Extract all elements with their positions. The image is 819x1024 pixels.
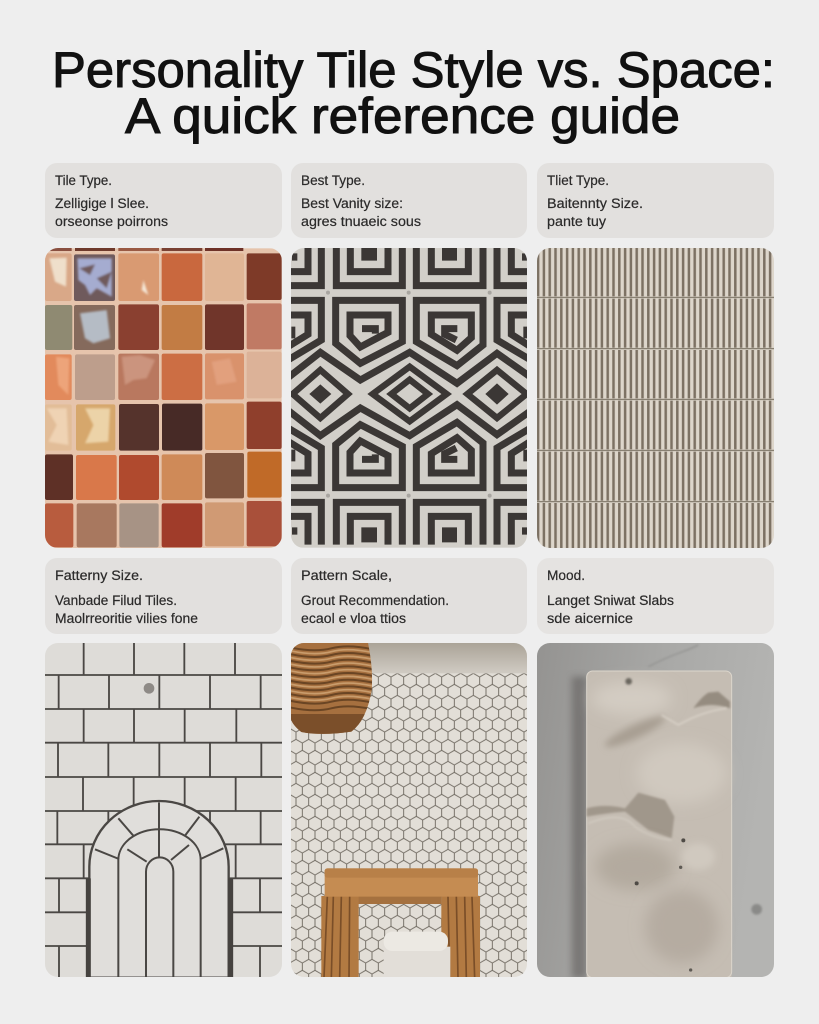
mirrored lower half [288,405,531,545]
caption: tilet type: pante tuy [547,214,606,229]
upper pentagon spirals [336,300,402,363]
panel: black and white geometric tiles [288,243,531,548]
caption: mood: Mood. [547,568,585,583]
caption: pattern size: Maolrreoritie vilies fone [55,611,198,626]
caption: best type [291,163,527,238]
panel: white subway tiles with arch [45,643,282,978]
caption: zellige tile type: Zelligige l Slee. [55,196,149,211]
caption: pattern scale: ecaol e vloa ttios [301,611,406,626]
wooden stool [321,868,480,978]
caption: tilet type: Tliet Type. [547,173,609,188]
title: Personality Tile Style vs. Space: [52,42,775,98]
hexagon zigzag [288,352,531,383]
caption: zellige tile type: Tile Type. [55,173,112,188]
panel: vertical stacked stripe tiles [537,248,777,548]
caption: tilet type [537,163,774,238]
arch [89,801,229,978]
rattan basket pendant [290,643,374,736]
top row squares [288,243,531,286]
caption: zellige tile type [45,163,282,238]
white ceramic vase [384,932,450,978]
upper wall [291,643,528,673]
caption: best type: Best Vanity size: [301,196,403,211]
caption: pattern size [45,558,282,634]
caption: best type: agres tnuaeic sous [301,214,421,229]
caption: mood: Langet Sniwat Slabs [547,593,674,608]
title [52,42,775,144]
panel: large stone slab [537,643,775,984]
panel: hexagon tile wall with basket and stool [290,643,528,978]
caption: pattern size: Fatterny Size. [55,568,143,583]
panel: terracotta zellige tiles [45,248,282,548]
title: A quick reference guide [125,88,680,144]
caption: best type: Best Type. [301,173,365,188]
caption: mood: sde aicernice [547,611,633,626]
caption: tilet type: Baitennty Size. [547,196,643,211]
caption: pattern scale: Pattern Scale, [301,568,392,583]
caption: zellige tile type: orseonse poirrons [55,214,168,229]
caption: pattern size: Vanbade Filud Tiles. [55,593,177,608]
caption: mood [537,558,774,634]
stone veining [587,678,730,972]
caption: pattern scale [291,558,527,634]
caption: pattern scale: Grout Recommendation. [301,593,449,608]
